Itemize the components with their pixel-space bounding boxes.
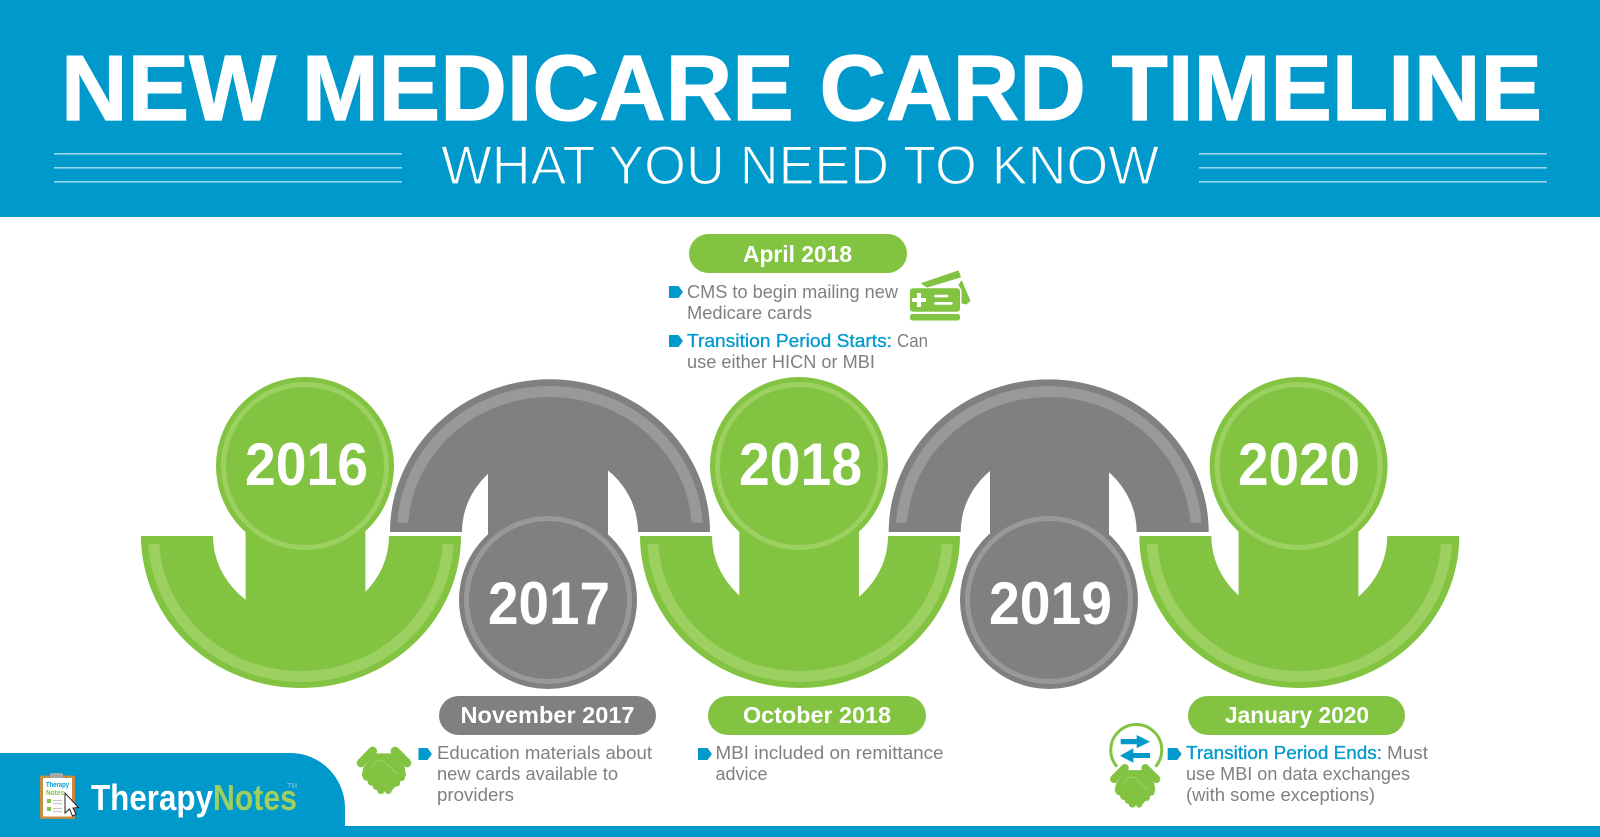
bullet [1168,748,1182,760]
trademark: TM [287,783,297,790]
text: MBI remittance: MBI included on remittance [716,742,944,763]
text: transition starts: Transition Period Starts: [687,330,892,351]
pill: October 2018: October 2018 [743,702,891,728]
pill: October 2018 [708,696,926,735]
circle: 2016: 2016 [245,431,368,498]
text: MBI remittance: advice [716,763,768,784]
bullet [698,748,712,760]
icon: handshake [361,751,407,794]
text: mailing: Medicare cards [687,302,812,323]
icon: medicare cards [910,271,970,320]
circle: 2018 [710,377,888,555]
text: transition starts [687,330,928,372]
text: mailing: CMS to begin mailing new [687,281,899,302]
bottom strip [0,826,1600,837]
timeline: 2016 cup [141,531,461,688]
timeline: 2017 arch [390,379,710,534]
text: transition ends: use MBI on data exchanges [1186,763,1410,784]
circle: 2017: 2017 [488,570,610,637]
circle: 2016 [216,377,394,555]
text: transition ends [1186,742,1428,805]
circle: 2019: 2019 [989,570,1112,637]
icon: clipboard logo [40,773,78,819]
circle: 2017 [459,511,637,689]
right decorative lines [1199,153,1547,183]
text: transition starts: use either HICN or MBI [687,351,875,372]
header banner [0,0,1600,217]
icon: clipboard logo: Therapy [46,782,69,789]
circle: 2018: 2018 [739,431,862,498]
circle: 2020: 2020 [1238,431,1360,498]
text: transition ends: (with some exceptions) [1186,784,1375,805]
logo wordmark: TherapyNotes [91,777,297,818]
timeline: 2018 cup [640,532,960,688]
timeline: 2019 arch [888,379,1209,534]
text: education materials: providers [437,784,514,805]
text: education materials: Education materials about [437,742,652,763]
pill: April 2018 [689,234,907,273]
pill: April 2018: April 2018 [743,241,852,267]
pill: November 2017: November 2017 [460,702,634,728]
pill: January 2020: January 2020 [1225,702,1369,728]
text: transition ends: Must [1387,742,1428,763]
pill: January 2020 [1188,696,1405,735]
callout: April 2018 [669,234,970,372]
left decorative lines [54,153,402,183]
text: transition ends: Transition Period Ends: [1186,742,1382,763]
bullet [418,748,432,760]
pill: November 2017 [439,696,656,735]
title: NEW MEDICARE CARD TIMELINE [61,36,1542,140]
subtitle: WHAT YOU NEED TO KNOW [441,134,1159,196]
bullet [669,335,683,347]
circle: 2019 [960,511,1138,689]
circle: 2020 [1210,377,1388,555]
timeline: 2020 cup [1139,532,1460,688]
callout: October 2018 [698,696,944,784]
text: education materials: new cards available to [437,763,618,784]
icon: clipboard logo: Notes [46,790,64,797]
text: transition starts: Can [897,330,928,351]
icon: exchange arrows with handshake [1111,724,1162,808]
callout: November 2017 [361,696,656,805]
callout: January 2020 [1111,696,1428,808]
bullet [669,286,683,298]
logo panel [0,753,345,826]
